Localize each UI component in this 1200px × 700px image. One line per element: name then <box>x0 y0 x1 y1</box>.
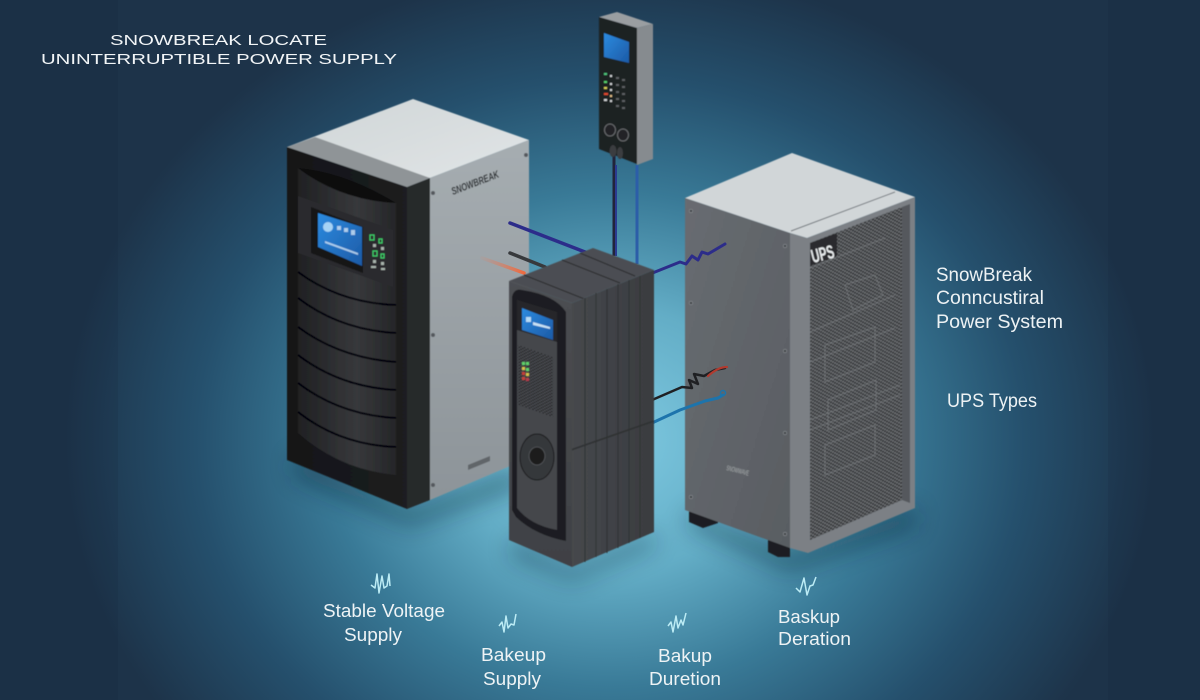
left UPS front face <box>287 147 407 509</box>
title: UNINTERRUPTIBLE POWER SUPPLY <box>41 51 397 68</box>
title <box>41 32 397 68</box>
controller top edge <box>599 12 653 28</box>
right UPS mesh grille <box>810 204 910 540</box>
controller side <box>637 24 653 165</box>
right UPS cabinet <box>685 153 915 557</box>
left UPS top front band <box>287 137 430 187</box>
right caption: system name <box>936 265 1063 333</box>
label: stable voltage supply <box>323 601 445 645</box>
label: bakeup supply <box>481 645 546 689</box>
left UPS corner strip <box>407 178 430 509</box>
left UPS cabinet <box>287 99 529 509</box>
label: bakeup supply: Supply <box>483 669 541 689</box>
wall controller <box>599 12 653 165</box>
middle UPS front face <box>509 281 572 567</box>
controller dials <box>604 124 628 141</box>
left UPS louvre stack <box>298 168 396 475</box>
right UPS top face <box>685 153 915 238</box>
label: bakup duretion: Duretion <box>649 669 721 689</box>
middle UPS status lights <box>522 362 529 381</box>
connecting cables from left UPS <box>482 223 585 273</box>
right UPS side screws <box>689 209 787 536</box>
right caption: system name: SnowBreak <box>936 265 1032 286</box>
title: SNOWBREAK LOCATE <box>110 32 327 49</box>
label: stable voltage supply: Supply <box>344 625 402 645</box>
controller front <box>599 17 637 164</box>
label: bakeup supply: Bakeup <box>481 645 546 665</box>
left UPS top face <box>287 99 529 187</box>
label: baskup deration: Baskup <box>778 607 840 627</box>
right UPS front frame <box>790 197 915 553</box>
cables into right UPS <box>650 244 727 423</box>
controller cables <box>614 150 637 264</box>
controller cable glands <box>610 145 623 159</box>
middle UPS vent grid <box>518 345 553 417</box>
left UPS side screws <box>431 153 528 487</box>
right UPS feet <box>689 505 790 557</box>
icon: voltage wave <box>796 577 816 595</box>
right caption: system name: Power System <box>936 312 1063 333</box>
right caption: UPS types: UPS Types <box>947 391 1037 412</box>
left UPS side panel <box>430 140 529 500</box>
label: bakup duretion <box>649 646 721 689</box>
middle UPS dial <box>520 434 554 480</box>
right UPS logo <box>809 233 837 268</box>
middle UPS cabinet <box>509 248 654 567</box>
label: baskup deration: Deration <box>778 629 851 649</box>
feature: baskup deration <box>778 577 851 649</box>
right UPS side panel <box>685 198 790 548</box>
middle UPS screen <box>517 300 557 342</box>
left UPS display panel <box>298 196 393 287</box>
controller indicator keys <box>604 73 625 109</box>
floor shadows <box>295 455 915 580</box>
label: stable voltage supply: Stable Voltage <box>323 601 445 621</box>
middle UPS top face <box>509 248 654 303</box>
middle UPS right panel <box>572 270 654 567</box>
feature: bakeup supply <box>481 614 546 689</box>
icon: voltage wave <box>668 613 686 632</box>
controller screen <box>604 33 629 63</box>
right UPS logo: UPS <box>809 242 837 268</box>
middle UPS front bezel <box>512 290 566 541</box>
label: baskup deration <box>778 607 851 649</box>
left UPS vent label <box>468 456 490 470</box>
feature: stable voltage supply <box>323 574 445 645</box>
right caption: system name: Conncustiral <box>936 288 1044 309</box>
icon: voltage wave <box>499 614 516 632</box>
right UPS model label: SNOWWAVE <box>726 465 750 478</box>
label: bakup duretion: Bakup <box>658 646 712 666</box>
feature: bakup duretion <box>649 613 721 689</box>
icon: voltage wave <box>371 574 390 593</box>
left UPS brand label: SNOWBREAK <box>450 168 502 198</box>
